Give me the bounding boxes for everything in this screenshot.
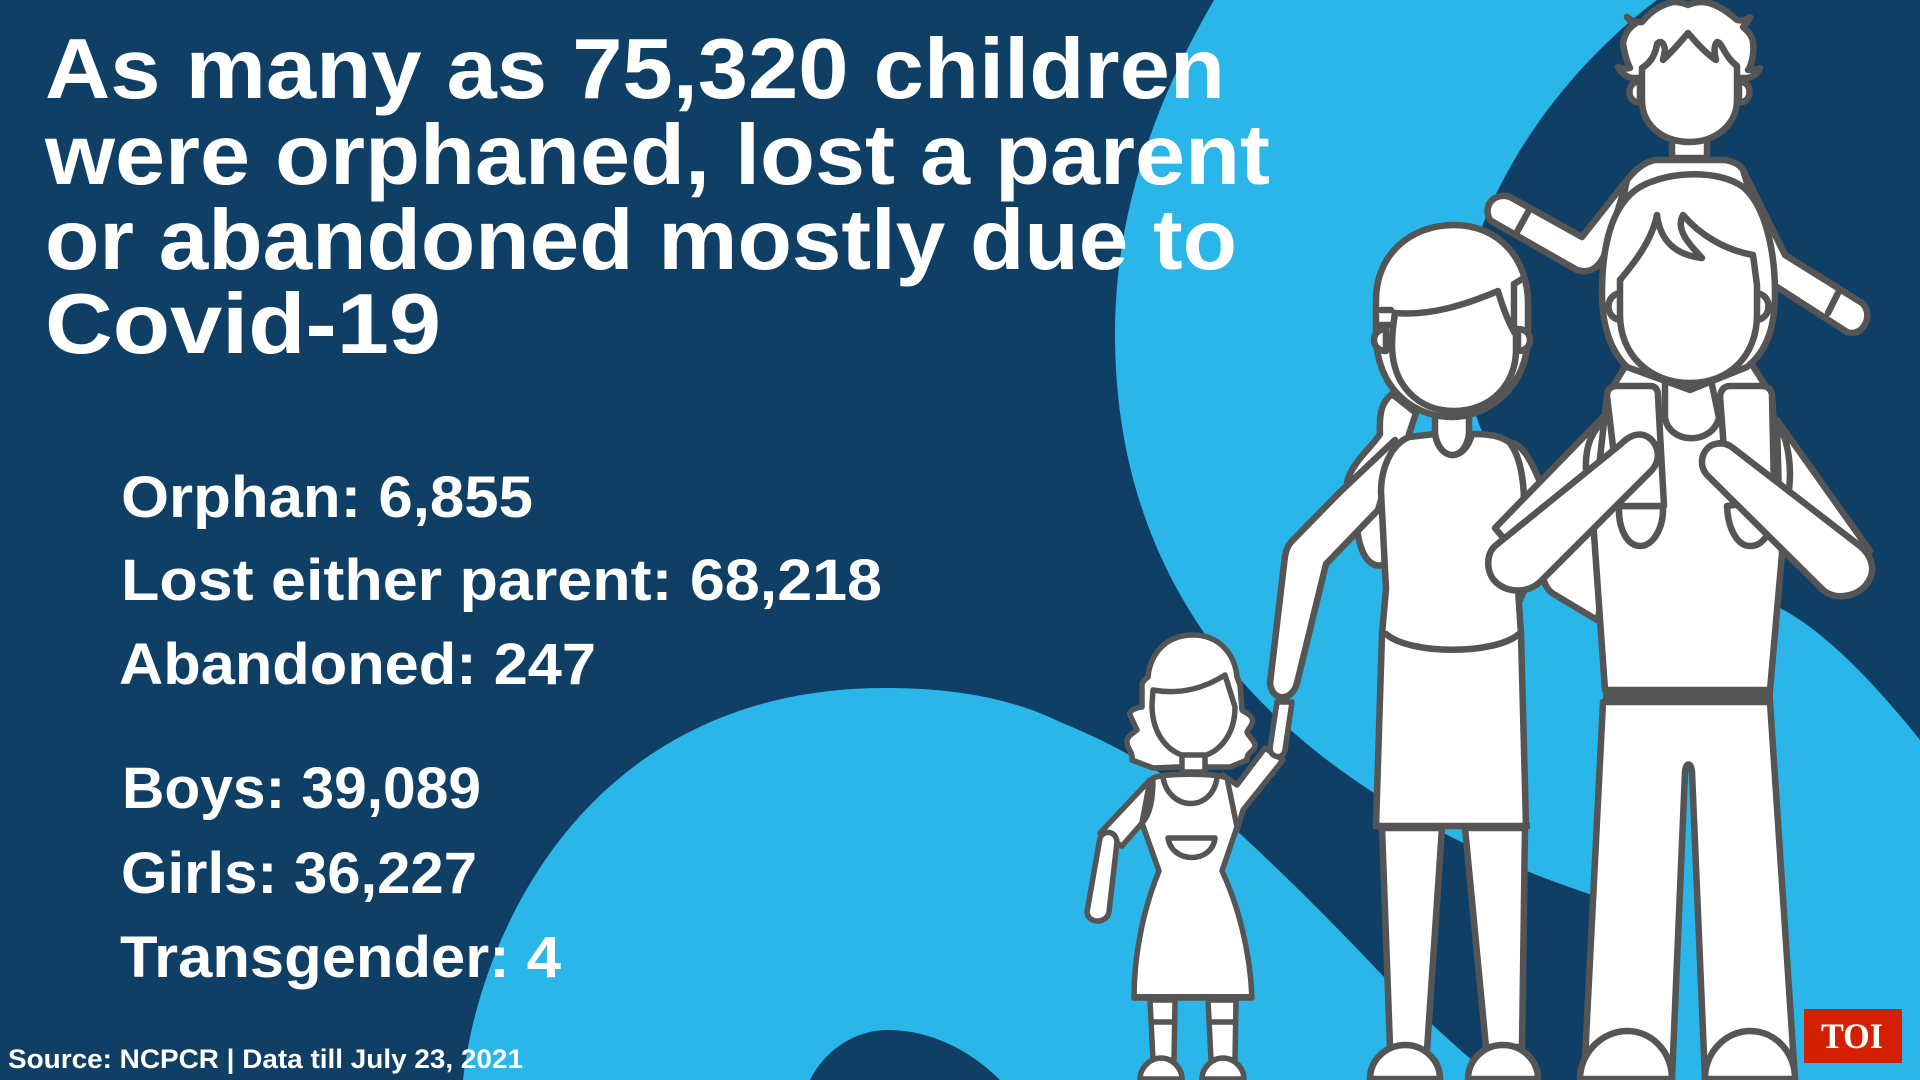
source note: Source: NCPCR | Data till July 23, 2021 [8,1044,523,1074]
title [44,22,1270,372]
icon: man forearms [1488,435,1872,596]
icon: man figure [1495,174,1870,1079]
icon: girl figure [1087,635,1292,1079]
icon: boy arms and torso [1488,160,1867,333]
stats: gender counts: Boys: 39,089 [122,756,481,821]
stats: category counts [119,465,882,697]
TOI logo [1804,1009,1902,1063]
stats: gender counts: Girls: 36,227 [121,841,477,906]
TOI logo: TOI [1821,1016,1883,1056]
stats: gender counts [120,756,561,990]
icon: boy head [1618,2,1760,158]
title: or abandoned mostly due to [45,193,1237,288]
stats: category counts: Abandoned: 247 [119,632,596,697]
title: As many as 75,320 children [45,22,1225,117]
title: Covid-19 [45,277,441,372]
title: were orphaned, lost a parent [44,108,1270,203]
stats: category counts: Orphan: 6,855 [121,465,533,530]
icon: woman figure [1270,225,1556,1079]
icon: boy legs on shoulders [1607,386,1774,546]
stats: category counts: Lost either parent: 68,218 [121,548,882,613]
stats: gender counts: Transgender: 4 [120,925,561,990]
